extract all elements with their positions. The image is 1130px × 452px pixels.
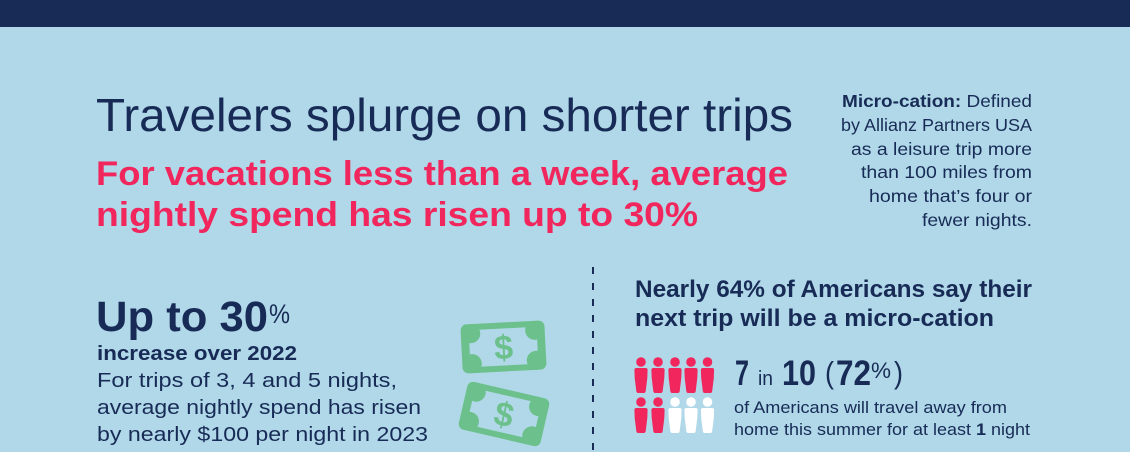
text: travel away: [734, 398, 1030, 439]
stat: 7 in 10: 10: [782, 354, 816, 393]
subtitle: [96, 155, 788, 234]
micro-cation definition: by Allianz Partners USA: [841, 115, 1032, 135]
stat: up to 30%: Up to 30: [96, 293, 268, 341]
stat: 7 in 10: [735, 354, 903, 393]
icon: people 7 of 10: [634, 357, 714, 433]
icon: dollar bill bottom: [458, 381, 550, 447]
stat: 7 in 10: 72: [836, 354, 871, 393]
stat: up to 30%: average nightly spend has risen: [97, 396, 421, 419]
icon: dollar bill bottom: $: [490, 394, 517, 436]
stat: 7 in 10: (: [825, 355, 835, 390]
stat: up to 30%: For trips of 3, 4 and 5 nights,: [97, 369, 397, 392]
subtitle: nightly spend has risen up to 30%: [96, 196, 698, 234]
heading: 64% of Americans: next trip will be a micro-cation: [635, 305, 994, 332]
micro-cation definition: [841, 91, 1032, 230]
micro-cation definition: home that’s four or: [869, 186, 1032, 206]
micro-cation definition: Micro-cation: Defined: [842, 91, 1032, 111]
text: travel away: of Americans will travel away from: [734, 398, 1007, 417]
stat: 7 in 10: %: [871, 358, 891, 383]
icon: dollar bill top: [460, 320, 547, 374]
stat: 7 in 10: 7: [735, 354, 749, 393]
micro-cation definition: as a leisure trip more: [851, 139, 1032, 159]
text: travel away: home this summer for at least 1 night: [734, 420, 1030, 439]
stat: 7 in 10: in: [758, 368, 773, 390]
vertical divider: [592, 267, 594, 452]
subtitle: For vacations less than a week, average: [96, 155, 788, 193]
heading: 64% of Americans: [635, 276, 1032, 332]
top banner: [0, 0, 1130, 27]
icon: dollar bill top: $: [493, 329, 514, 367]
stat: up to 30%: by nearly $100 per night in 2023: [97, 423, 428, 446]
stat: up to 30%: %: [269, 299, 290, 329]
micro-cation definition: fewer nights.: [922, 210, 1032, 230]
heading: 64% of Americans: Nearly 64% of Americans say their: [635, 276, 1032, 303]
stat: up to 30%: increase over 2022: [97, 343, 297, 365]
stat: 7 in 10: ): [894, 355, 903, 390]
stat: up to 30%: [96, 293, 428, 446]
title: Travelers splurge on shorter trips: [96, 89, 793, 141]
micro-cation definition: than 100 miles from: [861, 162, 1032, 182]
